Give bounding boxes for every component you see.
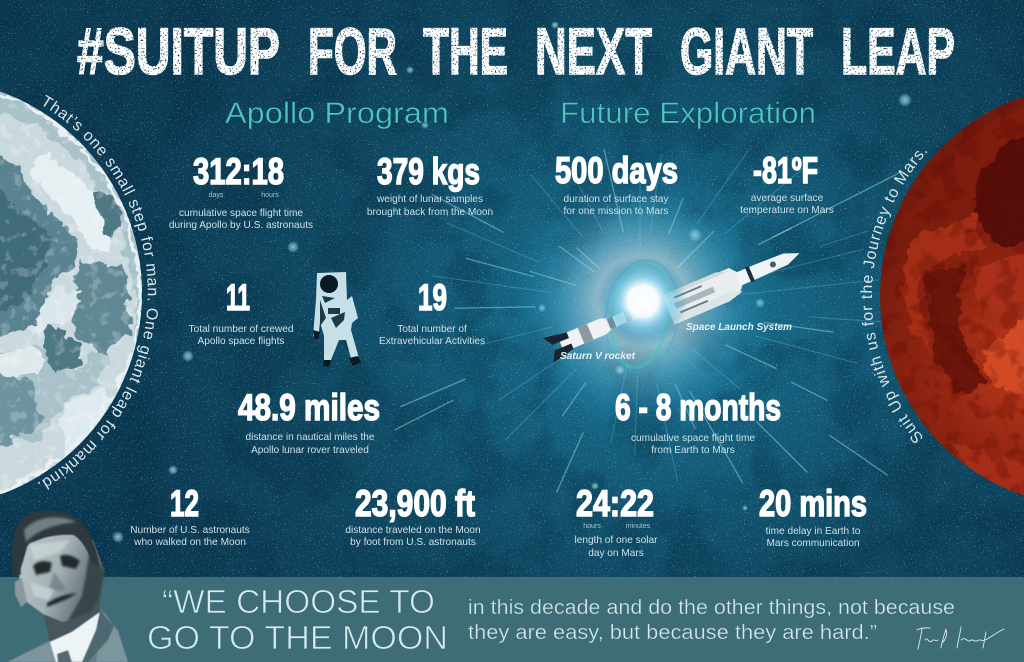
stat: 23,900 ft: by foot from U.S. astronauts (350, 537, 476, 548)
stat: -81F: average surface (751, 193, 824, 204)
quote remainder: in this decade and do the other things, not because (468, 597, 955, 619)
stat: 48.9 miles: 48.9 miles (238, 387, 380, 428)
stat: 19: Extravehicular Activities (379, 336, 485, 347)
stat: 312:18 (169, 151, 313, 231)
stat: 48.9 miles (238, 387, 380, 456)
stat: 19 (379, 277, 485, 347)
stat: 11 (189, 277, 293, 347)
stat: 6-8 months: from Earth to Mars (651, 445, 735, 456)
stat: -81F: -81ºF (753, 150, 818, 191)
stat: 312:18: hours (261, 192, 279, 199)
portrait: John F. Kennedy (7, 510, 128, 662)
quote lead: GO TO THE MOON (147, 619, 448, 656)
stat: 24:22: day on Mars (588, 548, 644, 559)
stat: 20 mins (759, 483, 867, 549)
stat: 6-8 months: cumulative space flight time (631, 433, 755, 444)
white core over rocket ends (599, 257, 687, 345)
stat: 379 kgs (367, 151, 493, 218)
signature (917, 627, 1004, 649)
quote band (0, 577, 1024, 662)
stat: 11: Total number of crewed (189, 324, 293, 335)
label: Space Launch System: Space Launch System (686, 322, 792, 333)
stat: 20 mins: time delay in Earth to (766, 526, 861, 537)
stat: 500 days (555, 150, 678, 217)
moon quote on arc: That’s one small step for man. One giant leap for mankind. (38, 94, 158, 490)
stat: 312:18: days (209, 192, 224, 199)
core light burst (507, 167, 777, 437)
title: THE (423, 14, 508, 88)
title (77, 14, 955, 88)
icon: astronaut (313, 272, 361, 367)
heading: Apollo Program: Apollo Program (225, 97, 449, 130)
title: #SUITUP (77, 14, 280, 88)
rocket: Saturn V (543, 295, 657, 363)
mars caption on arc: Suit Up with us for the Journey to Mars. (860, 151, 928, 443)
stat: 379 kgs: 379 kgs (377, 151, 480, 192)
stat: 312:18: 312:18 (193, 151, 284, 192)
stat: 24:22: hours (583, 523, 601, 530)
stat: 24:22: 24:22 (576, 483, 654, 524)
label: Saturn V rocket: Saturn V rocket (560, 351, 636, 362)
mars (880, 96, 1024, 496)
moon (0, 92, 142, 494)
rocket: Space Launch System (662, 239, 806, 325)
stat: 312:18: cumulative space flight time (179, 208, 303, 219)
stat: 11: Apollo space flights (198, 336, 284, 347)
stat: 12: Number of U.S. astronauts (130, 525, 250, 536)
stat: 24:22: minutes (626, 523, 651, 530)
stat: 12: 12 (170, 483, 199, 524)
stat: 23,900 ft: distance traveled on the Moon (345, 525, 481, 536)
stat: 20 mins: Mars communication (766, 538, 860, 549)
stat: 12 (130, 483, 250, 548)
quote lead (147, 583, 448, 656)
stat: 500 days: for one mission to Mars (564, 206, 668, 217)
quote remainder: they are easy, but because they are hard.” (468, 622, 877, 644)
title: LEAP (841, 14, 955, 88)
stat: 48.9 miles: Apollo lunar rover traveled (251, 445, 369, 456)
stat: 24:22: length of one solar (574, 535, 658, 546)
stat: 379 kgs: weight of lunar samples (376, 194, 483, 205)
speed rays (395, 149, 900, 492)
heading: Future Exploration: Future Exploration (560, 97, 816, 130)
quote remainder (468, 597, 955, 644)
stat: 11: 11 (226, 277, 250, 318)
stat: 20 mins: 20 mins (759, 483, 867, 524)
stat: 12: who walked on the Moon (133, 537, 246, 548)
stat: 312:18: during Apollo by U.S. astronauts (169, 220, 313, 231)
title: GIANT (680, 14, 813, 88)
stat: -81F: temperature on Mars (740, 205, 834, 216)
stat: 379 kgs: brought back from the Moon (367, 207, 493, 218)
stat: 23,900 ft: 23,900 ft (355, 483, 475, 524)
stat: 23,900 ft (345, 483, 481, 548)
stat: 19: Total number of (397, 324, 467, 335)
title: NEXT (535, 14, 652, 88)
title: FOR (308, 14, 397, 88)
stat: 6-8 months: 6 - 8 months (615, 387, 781, 428)
stat: 24:22 (574, 483, 658, 559)
stat: 48.9 miles: distance in nautical miles the (245, 432, 375, 443)
quote lead: “WE CHOOSE TO (162, 583, 435, 620)
stat: 500 days: duration of surface stay (564, 194, 669, 205)
stat: -81F (740, 150, 834, 216)
stat: 6-8 months (615, 387, 781, 456)
stat: 500 days: 500 days (555, 150, 678, 191)
stat: 19: 19 (418, 277, 447, 318)
